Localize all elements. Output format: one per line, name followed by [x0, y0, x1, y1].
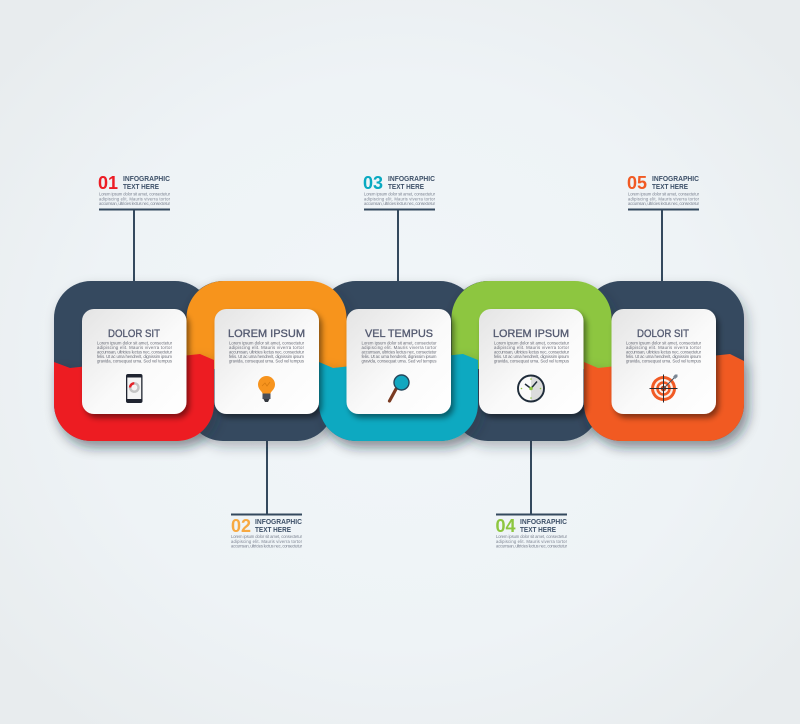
callout: 02: 02 [231, 516, 251, 536]
text block: card 4 [494, 340, 570, 363]
callout: 04: TEXT HERE [520, 527, 556, 534]
callout: 01: TEXT HERE [123, 184, 159, 191]
icon: light bulb [258, 376, 275, 402]
callout: 03: Lorem ipsum dolor sit amet, consectetur [364, 192, 436, 196]
text block: card 5 [626, 340, 702, 363]
text block: card 1: adipiscing elit. Mauris viverra tortor [97, 345, 173, 350]
callout: 04: INFOGRAPHIC [520, 519, 567, 526]
callout: 01: accumsan, ultricies lectus nec, consectetur [99, 201, 171, 206]
callout: 01: adipiscing elit. Mauris viverra tortor [99, 196, 171, 201]
segment: green upper half, step 4 [452, 280, 612, 370]
text block: card 4: adipiscing elit. Mauris viverra tortor [494, 345, 570, 350]
panel: card 1 [82, 309, 186, 414]
text block: card 3: Lorem ipsum dolor sit amet, consectetur [362, 340, 437, 345]
text block: card 4: Lorem ipsum dolor sit amet, consectetur [494, 340, 570, 345]
callout: 02 [231, 514, 303, 549]
callout: 02: adipiscing elit. Mauris viverra tortor [231, 539, 303, 544]
callout: 02: TEXT HERE [255, 527, 291, 534]
callout: 03: accumsan, ultricies lectus nec, consectetur [364, 201, 436, 206]
callout: 05: adipiscing elit. Mauris viverra tortor [628, 196, 700, 201]
text block: card 3: accumsan, ultricies lectus nec, consectetur [362, 349, 437, 354]
text block: card 2: Lorem ipsum dolor sit amet, consectetur [229, 340, 305, 345]
heading: card 4: LOREM IPSUM [493, 328, 569, 340]
text block: card 5: accumsan, ultricies lectus nec, consectetur [626, 349, 702, 354]
callout: 05: Lorem ipsum dolor sit amet, consectetur [628, 192, 700, 196]
text block: card 2: adipiscing elit. Mauris viverra tortor [229, 345, 305, 350]
panel: card 3 [346, 309, 451, 414]
text block: card 1: felis. Ut ac urna hendrerit, dignissim ipsum [97, 354, 172, 359]
text block: card 5: gravida, consequat urna. Sed vel tempus [626, 358, 701, 363]
segment: orange-red lower half, step 5 [584, 354, 755, 454]
text block: card 2 [229, 340, 305, 363]
text block: card 4: accumsan, ultricies lectus nec, consectetur [494, 349, 570, 354]
connector stems [134, 209, 662, 515]
text block: card 1: Lorem ipsum dolor sit amet, consectetur [97, 340, 173, 345]
callout: 03: INFOGRAPHIC [388, 176, 435, 183]
segment: orange upper half, step 2 [186, 280, 346, 369]
callout: 04: adipiscing elit. Mauris viverra tortor [496, 539, 568, 544]
icon: smartphone [126, 374, 142, 403]
text block: card 3: felis. Ut ac urna hendrerit, dignissim ipsum [362, 354, 437, 359]
text block: card 5: adipiscing elit. Mauris viverra tortor [626, 345, 702, 350]
text block: card 3: gravida, consequat urna. Sed vel tempus [362, 358, 436, 363]
callout: 01: Lorem ipsum dolor sit amet, consectetur [99, 192, 171, 196]
callout: 04: accumsan, ultricies lectus nec, consectetur [496, 544, 568, 549]
dark base segments [54, 281, 744, 441]
callout: 05: 05 [627, 173, 647, 193]
icon: target [650, 374, 678, 402]
callout: 05 [627, 173, 700, 210]
callout: 05: accumsan, ultricies lectus nec, consectetur [628, 201, 700, 206]
text block: card 1 [97, 340, 173, 363]
callout: 02: INFOGRAPHIC [255, 519, 302, 526]
callout: 02: Lorem ipsum dolor sit amet, consectetur [231, 534, 303, 539]
callout: 01: 01 [98, 173, 118, 193]
heading: card 3: VEL TEMPUS [365, 328, 433, 340]
panel: card 2 [214, 309, 319, 414]
text block: card 4: gravida, consequat urna. Sed vel tempus [494, 358, 569, 363]
callout: 03 [363, 173, 436, 210]
text block: card 2: felis. Ut ac urna hendrerit, dignissim ipsum [229, 354, 304, 359]
text block: card 1: gravida, consequat urna. Sed vel tempus [97, 358, 172, 363]
heading: card 1: DOLOR SIT [108, 328, 160, 340]
text block: card 2: accumsan, ultricies lectus nec, consectetur [229, 349, 305, 354]
text block: card 5: felis. Ut ac urna hendrerit, dignissim ipsum [626, 354, 701, 359]
text block: card 1: accumsan, ultricies lectus nec, consectetur [97, 349, 173, 354]
callout: 02: accumsan, ultricies lectus nec, consectetur [231, 544, 303, 549]
callout: 05: TEXT HERE [652, 184, 688, 191]
callout: 03: adipiscing elit. Mauris viverra tortor [364, 196, 436, 201]
callout: 01: INFOGRAPHIC [123, 176, 170, 183]
callout: 04 [496, 514, 568, 549]
panel: card 5 [612, 309, 716, 414]
segment: red lower half, step 1 [51, 354, 215, 454]
callout: 03: TEXT HERE [388, 184, 424, 191]
callout: 01 [98, 173, 171, 210]
callout: 05: INFOGRAPHIC [652, 176, 699, 183]
heading: card 2: LOREM IPSUM [228, 328, 305, 340]
text block: card 5: Lorem ipsum dolor sit amet, consectetur [626, 340, 702, 345]
callout: 03: 03 [363, 173, 383, 193]
icon: magnifying glass [390, 375, 409, 401]
callout: 04: 04 [496, 516, 516, 536]
callout: 04: Lorem ipsum dolor sit amet, consectetur [496, 534, 568, 539]
heading: card 5: DOLOR SIT [637, 328, 689, 340]
text block: card 3 [362, 340, 437, 363]
text block: card 3: adipiscing elit. Mauris viverra tortor [362, 345, 437, 350]
panel: card 4 [479, 309, 584, 414]
text block: card 4: felis. Ut ac urna hendrerit, dignissim ipsum [494, 354, 569, 359]
icon: clock [518, 376, 544, 402]
text block: card 2: gravida, consequat urna. Sed vel tempus [229, 358, 304, 363]
segment: teal lower half, step 3 [319, 354, 479, 454]
